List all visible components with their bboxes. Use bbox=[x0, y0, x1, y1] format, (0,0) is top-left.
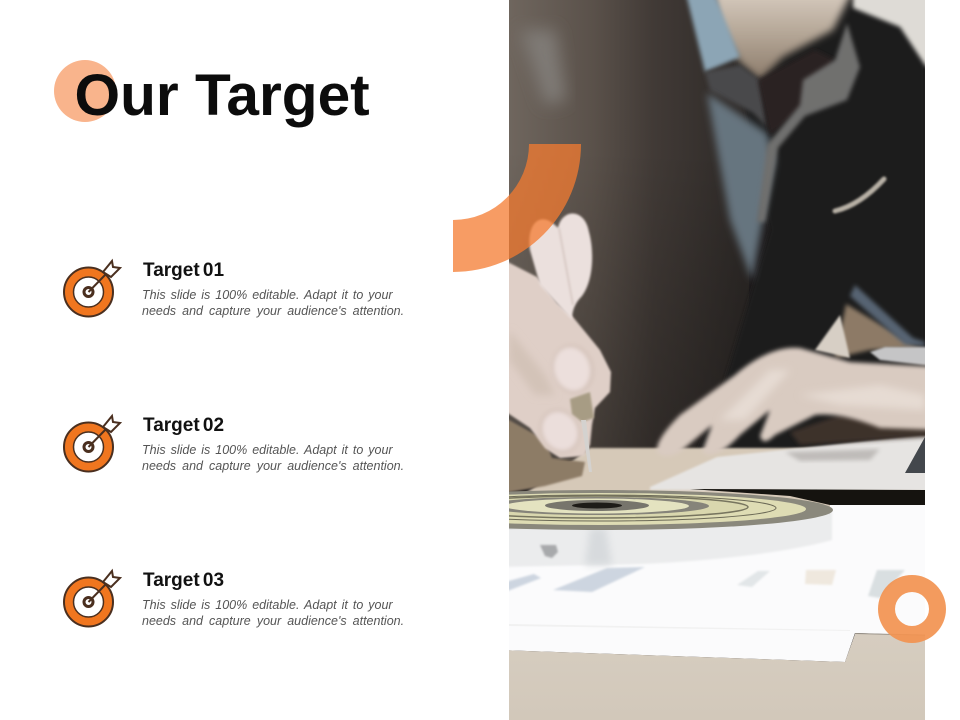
description 03: needs and capture your audience's attention. bbox=[142, 614, 404, 628]
background top right bbox=[850, 0, 925, 69]
laptop bbox=[650, 435, 940, 491]
decorative orange ring bbox=[878, 575, 946, 643]
photo: businessman aiming a dart bbox=[509, 0, 925, 720]
description 01: This slide is 100% editable. Adapt it to your bbox=[142, 288, 393, 302]
description 02 bbox=[142, 443, 404, 473]
description 01 bbox=[142, 288, 404, 318]
pocket square bbox=[835, 179, 884, 211]
icon: target with arrow 03 bbox=[64, 571, 120, 626]
dartboard side bbox=[500, 512, 832, 567]
heading: Target 03: Target 03 bbox=[143, 570, 224, 591]
heading: Target 01: Target 01 bbox=[143, 260, 225, 281]
icon: target with arrow 01 bbox=[64, 261, 120, 316]
left hand bbox=[500, 258, 611, 458]
dart barrel and needle bbox=[570, 392, 594, 422]
dartboard face bbox=[509, 490, 833, 530]
grey collar bbox=[757, 23, 860, 222]
description 02: needs and capture your audience's attention. bbox=[142, 459, 404, 473]
description 03 bbox=[142, 598, 404, 628]
right hand bbox=[657, 348, 940, 456]
target item 01 bbox=[64, 260, 404, 318]
skin: chin and neck bbox=[713, 0, 853, 80]
background, laptop screen, cuff bbox=[835, 304, 925, 358]
heading: Target 02: Target 02 bbox=[143, 415, 224, 436]
icon: target with arrow 02 bbox=[64, 416, 120, 472]
jacket bbox=[509, 0, 749, 460]
decorative circle behind title bbox=[54, 60, 116, 122]
description 02: This slide is 100% editable. Adapt it to your bbox=[142, 443, 393, 457]
table bottom bbox=[500, 634, 940, 720]
title: Our Target bbox=[74, 63, 370, 128]
description 01: needs and capture your audience's attention. bbox=[142, 304, 404, 318]
left hand lower shadowed part bbox=[509, 419, 586, 492]
shadow under right hand bbox=[790, 415, 940, 445]
papers bbox=[500, 505, 940, 662]
target item 02 bbox=[64, 415, 404, 473]
dark undershirt bbox=[758, 50, 835, 135]
description 03: This slide is 100% editable. Adapt it to your bbox=[142, 598, 393, 612]
shirt collar bbox=[685, 0, 740, 72]
dart flight bbox=[529, 213, 592, 320]
decorative quarter-ring arc bbox=[453, 144, 581, 272]
table bbox=[526, 446, 925, 507]
thumb and finger nails bbox=[546, 339, 600, 399]
target item 03 bbox=[64, 570, 404, 628]
